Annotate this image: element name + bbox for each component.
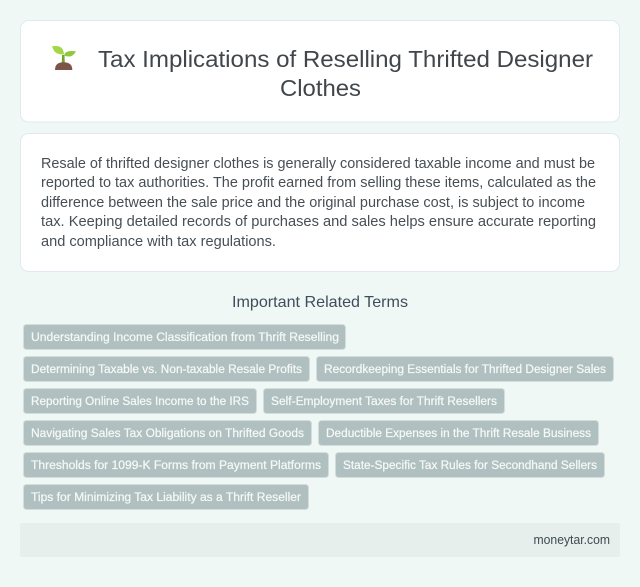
tag <box>24 388 256 414</box>
tag <box>24 324 346 350</box>
description text: tax. Keeping detailed records of purchases and sales helps ensure accurate reporting <box>41 214 596 230</box>
tag: State-Specific Tax Rules for Secondhand Sellers <box>343 458 597 472</box>
tag: Recordkeeping Essentials for Thrifted Designer Sales <box>324 362 606 376</box>
title: Clothes <box>280 75 361 101</box>
tag <box>24 452 328 478</box>
description text: difference between the sale price and the original purchase cost, is subject to income <box>41 195 585 211</box>
footer source: moneytar.com <box>534 533 610 547</box>
tag <box>316 356 614 382</box>
tag <box>24 484 308 510</box>
description text: Resale of thrifted designer clothes is generally considered taxable income and must be <box>41 156 595 172</box>
tag <box>24 356 310 382</box>
tag: Self-Employment Taxes for Thrift Resellers <box>271 394 497 408</box>
heading: important related terms: Important Related Terms <box>232 294 408 311</box>
panel: description <box>20 134 620 272</box>
tag: Deductible Expenses in the Thrift Resale Business <box>326 426 591 440</box>
tag <box>264 388 504 414</box>
title: Tax Implications of Reselling Thrifted Designer <box>98 46 593 72</box>
tag: Understanding Income Classification from Thrift Reselling <box>31 330 339 344</box>
panel: title header <box>20 20 620 122</box>
tag: Thresholds for 1099-K Forms from Payment Platforms <box>31 458 321 472</box>
title <box>98 46 593 101</box>
description text: reported to tax authorities. The profit earned from selling these items, calculated as the <box>41 175 596 191</box>
icon: seedling <box>52 46 76 70</box>
tag <box>318 420 598 446</box>
tag list <box>24 324 614 510</box>
tag <box>336 452 604 478</box>
tag: Navigating Sales Tax Obligations on Thrifted Goods <box>31 426 304 440</box>
description text: and compliance with tax regulations. <box>41 234 276 250</box>
tag: Determining Taxable vs. Non-taxable Resale Profits <box>31 362 302 376</box>
tag <box>24 420 312 446</box>
tag: Tips for Minimizing Tax Liability as a Thrift Reseller <box>31 490 301 504</box>
description text <box>41 156 596 250</box>
tag: Reporting Online Sales Income to the IRS <box>31 394 249 408</box>
footer bar <box>20 523 620 557</box>
